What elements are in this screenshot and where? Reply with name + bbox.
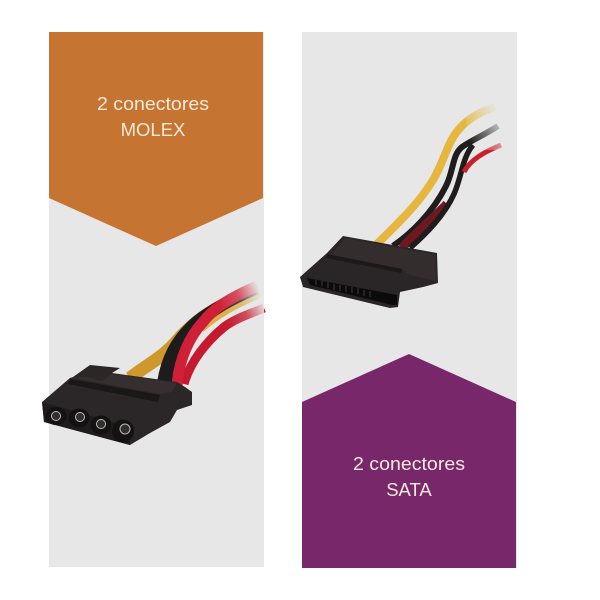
pin sockets — [46, 407, 134, 442]
icon: SATA connector — [300, 100, 502, 308]
wire fade — [216, 276, 264, 332]
panel: MOLEX — [42, 32, 264, 567]
connector contact ticks — [316, 280, 370, 297]
connector face — [42, 402, 130, 445]
heading: 2 conectores SATA: 2 conectores — [353, 453, 465, 474]
wire fade — [466, 100, 502, 150]
connector body — [42, 365, 192, 445]
panel: SATA — [300, 32, 517, 568]
panel background: SATA — [302, 32, 517, 568]
connector body — [300, 236, 438, 308]
banner: SATA — [302, 354, 516, 568]
connector top shading — [73, 374, 177, 394]
heading: 2 conectores SATA — [353, 453, 465, 500]
pins — [52, 412, 130, 434]
connector ridge — [68, 379, 160, 402]
connector ridge — [326, 254, 402, 273]
heading: 2 conectores MOLEX: 2 conectores — [97, 93, 209, 114]
banner: MOLEX — [49, 32, 263, 246]
panel background: MOLEX — [49, 32, 264, 567]
wires: SATA — [376, 107, 501, 248]
icon: MOLEX connector — [42, 276, 264, 445]
heading: 2 conectores MOLEX — [97, 93, 209, 140]
wires: MOLEX — [130, 284, 264, 386]
connector contacts slot — [307, 278, 397, 305]
heading: 2 conectores SATA: SATA — [386, 479, 432, 500]
connector top shading — [330, 238, 436, 281]
heading: 2 conectores MOLEX: MOLEX — [121, 119, 185, 140]
